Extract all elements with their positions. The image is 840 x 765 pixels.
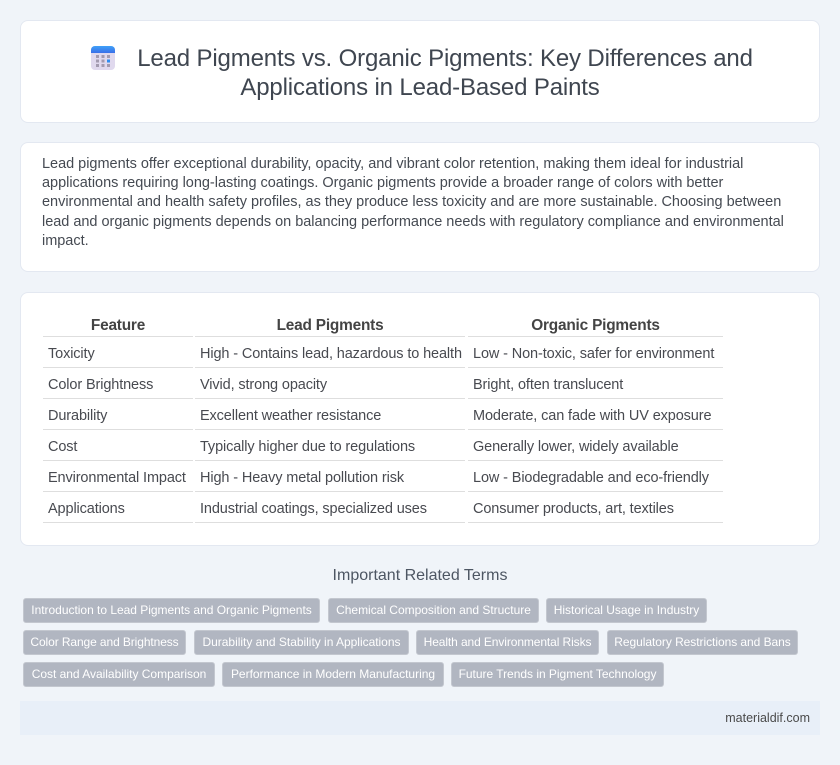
comparison table: Generally lower, widely available — [473, 439, 679, 455]
heading: related terms: Important Related Terms — [333, 567, 507, 584]
comparison table: Vivid, strong opacity — [200, 377, 327, 393]
title — [137, 45, 753, 101]
tag list: related terms: Cost and Availability Comparison — [32, 667, 206, 681]
title: Applications in Lead-Based Paints — [240, 74, 600, 101]
text block: summary — [42, 156, 784, 249]
comparison table: Typically higher due to regulations — [200, 439, 415, 455]
tag list: related terms: Performance in Modern Manufacturing — [231, 667, 435, 681]
comparison table: Applications — [48, 501, 125, 517]
comparison table: Feature — [91, 317, 145, 334]
comparison table: Industrial coatings, specialized uses — [200, 501, 427, 517]
panel: title header — [20, 20, 820, 123]
comparison table: Color Brightness — [48, 377, 153, 393]
tag list: related terms: Durability and Stability in Applications — [202, 635, 400, 649]
tag list: related terms: Color Range and Brightness — [30, 635, 179, 649]
text block: summary: lead and organic pigments depends on balancing performance needs with regulatory compliance and environmental — [42, 214, 784, 230]
comparison table: High - Heavy metal pollution risk — [200, 470, 404, 486]
comparison table — [43, 317, 723, 523]
comparison table: Lead Pigments — [277, 317, 383, 334]
tag list: related terms: Historical Usage in Industry — [554, 603, 699, 617]
tag list: related terms: Regulatory Restrictions and Bans — [614, 635, 791, 649]
text block: summary: impact. — [42, 233, 89, 249]
comparison table: Consumer products, art, textiles — [473, 501, 674, 517]
comparison table: Excellent weather resistance — [200, 408, 381, 424]
panel: comparison table — [20, 292, 820, 546]
icon: calendar grid — [91, 46, 115, 70]
tag list: related terms: Introduction to Lead Pigments and Organic Pigments — [31, 603, 312, 617]
title: Lead Pigments vs. Organic Pigments: Key Differences and — [137, 45, 753, 72]
comparison table: Cost — [48, 439, 77, 455]
comparison table: Moderate, can fade with UV exposure — [473, 408, 711, 424]
comparison table: High - Contains lead, hazardous to health — [200, 346, 462, 362]
tag list: related terms: Chemical Composition and Structure — [336, 603, 531, 617]
tag list: related terms: Future Trends in Pigment Technology — [459, 667, 656, 681]
tag list: related terms: Health and Environmental Risks — [424, 635, 591, 649]
text block: summary: Lead pigments offer exceptional durability, opacity, and vibrant color retention, making them ideal for industrial — [42, 156, 743, 172]
comparison table: Low - Biodegradable and eco-friendly — [473, 470, 709, 486]
panel: summary paragraph — [20, 142, 820, 272]
text block: summary: applications requiring long-lasting coatings. Organic pigments provide a broader range of colors with better — [42, 175, 723, 191]
comparison table: Durability — [48, 408, 107, 424]
comparison table: Low - Non-toxic, safer for environment — [473, 346, 714, 362]
comparison table: Environmental Impact — [48, 470, 186, 486]
comparison table: Toxicity — [48, 346, 95, 362]
tag list: related terms — [23, 598, 798, 687]
footer bar — [20, 701, 820, 735]
comparison table: Bright, often translucent — [473, 377, 623, 393]
text block: summary: environmental and health safety profiles, as they produce less toxicity and are more sustainable. Choosing between — [42, 194, 781, 210]
comparison table: Organic Pigments — [531, 317, 660, 334]
footer text: materialdif.com — [725, 711, 810, 725]
